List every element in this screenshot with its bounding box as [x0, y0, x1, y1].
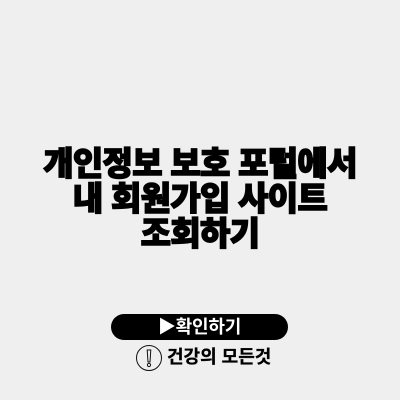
title — [42, 145, 357, 252]
title: 조회하기 — [141, 215, 259, 252]
button: confirm: ▶확인하기 — [158, 317, 241, 337]
title: 내 회원가입 사이트 — [73, 180, 327, 217]
brand name: 건강의 모든것 — [167, 347, 271, 367]
title: 개인정보 보호 포털에서 — [43, 145, 357, 182]
icon: exclamation circle — [136, 345, 162, 371]
brand row — [136, 345, 271, 371]
button: confirm — [111, 314, 288, 340]
